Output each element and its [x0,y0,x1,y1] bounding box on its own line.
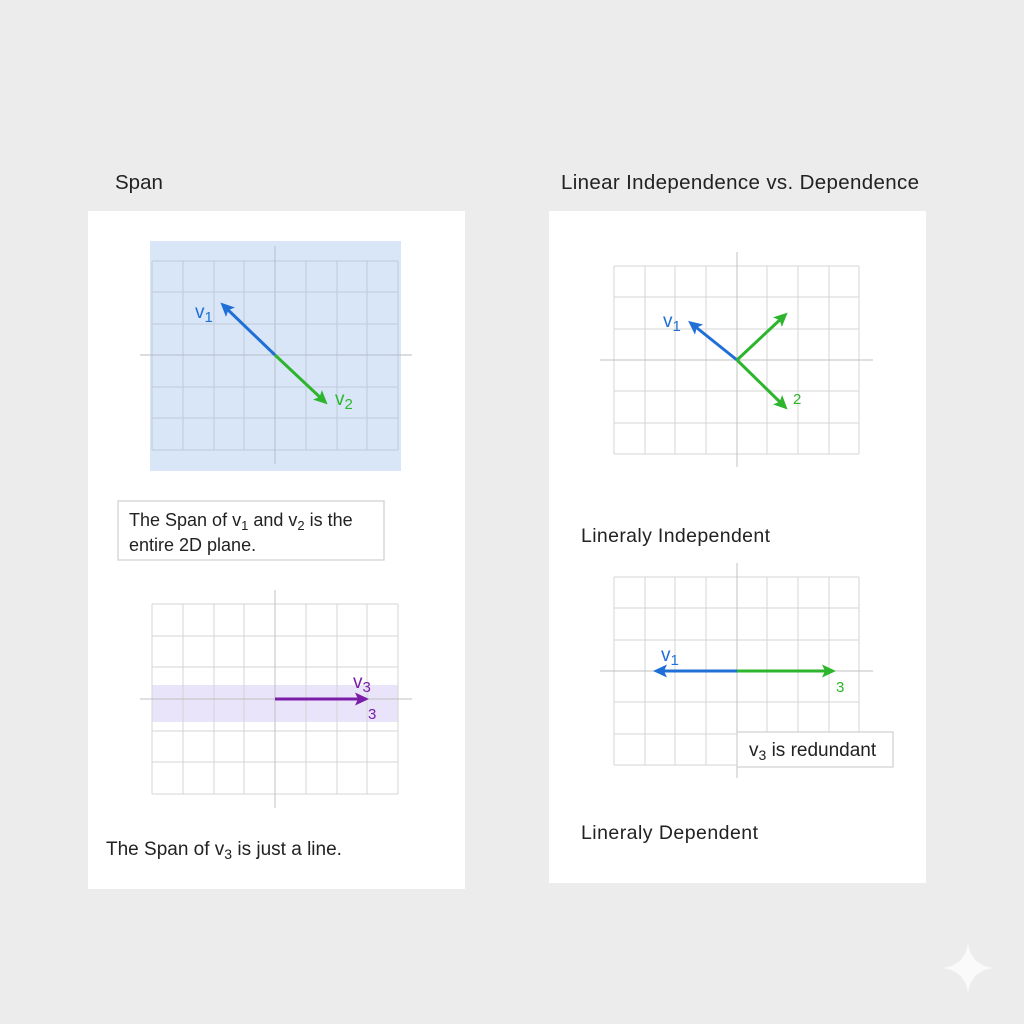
chart: span of v1 and v2 [140,241,412,471]
arrow: green up [737,316,784,360]
callout: span entire plane: entire 2D plane. [129,535,256,555]
arrow: v2 [275,355,324,401]
callout: span entire plane: 2 [297,518,305,533]
chart: independent vectors: 1 [672,318,681,335]
callout: span entire plane: 1 [241,518,248,533]
callout: span entire plane: The Span of v [129,510,241,530]
chart: dependent vectors: 1 [670,652,679,669]
callout: v3 redundant: v [749,740,758,761]
title: span: Span [115,171,163,194]
arrow: v1 [658,670,737,672]
title: linear independence vs dependence: Linear Independence vs. Dependence [561,171,919,194]
chart: dependent vectors: v [661,645,670,666]
chart: span of v3 [140,590,412,808]
chart: span of v3: 3 [362,679,371,696]
arrow: green down [737,360,784,406]
chart: independent vectors: v [663,311,672,332]
chart: span of v1 and v2: v [195,302,204,323]
chart: dependent vectors [600,563,893,778]
callout: span entire plane [118,501,384,560]
chart: span of v3: 3 [368,706,376,723]
panel: independence vs dependence [549,211,926,883]
arrow: v3 [737,670,831,672]
chart: span of v1 and v2: 2 [344,396,353,413]
text: span of v3 is a line: is just a line. [232,839,342,860]
chart: span of v1 and v2: 1 [204,309,213,326]
callout: v3 redundant: 3 [758,747,766,763]
callout: span entire plane: and v [248,510,297,530]
chart: span of v3: v [353,672,362,693]
chart: independent vectors: 2 [793,391,801,408]
text: span of v3 is a line: The Span of v [106,839,224,860]
label: linearly dependent: Lineraly Dependent [581,822,759,844]
text: span of v3 is a line: 3 [224,846,232,862]
chart: dependent vectors: 3 [836,679,844,696]
chart: independent vectors [600,252,873,467]
icon: sparkle [943,943,993,993]
arrow: v3 [275,698,364,700]
callout: v3 redundant [737,732,893,767]
arrow: v1 [224,306,275,355]
panel: span [88,211,465,889]
label: linearly independent: Lineraly Independent [581,525,771,547]
callout: v3 redundant: is redundant [766,740,877,761]
chart: span of v1 and v2: v [335,389,344,410]
callout: span entire plane: is the [305,510,353,530]
arrow: v1 [692,324,737,360]
